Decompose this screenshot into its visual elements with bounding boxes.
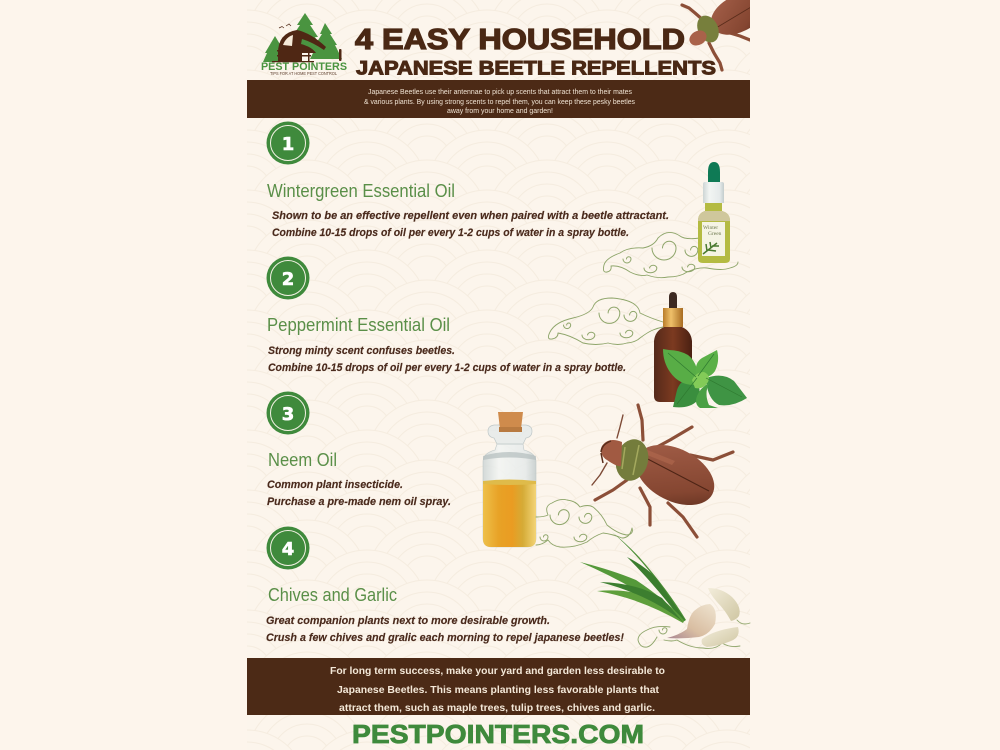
text 4: Crush a few chives and gralic each morning to repel japanese beetles! (266, 632, 624, 644)
text 1: Combine 10-15 drops of oil per every 1-2 cups of water in a spray bottle. (272, 227, 629, 239)
text 2 (268, 345, 626, 374)
text 4: Great companion plants next to more desirable growth. (266, 615, 550, 627)
title: JAPANESE BEETLE REPELLENTS (356, 58, 716, 80)
intro band: away from your home and garden! (447, 106, 553, 115)
icon: garlic cloves (667, 588, 740, 647)
badge 2 (266, 256, 310, 300)
badge 2: 2 (282, 269, 294, 290)
text 2: Combine 10-15 drops of oil per every 1-2 cups of water in a spray bottle. (268, 362, 626, 374)
title (355, 24, 716, 80)
logo: Pest Pointers: PEST POINTERS (261, 61, 347, 73)
text 3: Purchase a pre-made nem oil spray. (267, 496, 451, 508)
cloud swirl 1 (603, 232, 738, 278)
badge 4: 4 (282, 539, 294, 560)
text 1 (272, 210, 669, 239)
icon: brown beetle (592, 405, 733, 537)
heading 2: Peppermint Essential Oil (267, 315, 450, 335)
badge 3: 3 (282, 404, 294, 425)
step 3: neem oil (266, 392, 451, 508)
badge 4 (266, 526, 310, 570)
icon: wintergreen bottle: Green (708, 231, 722, 237)
step 4: chives and garlic (266, 526, 624, 644)
text 4 (266, 615, 624, 644)
logo: Pest Pointers (261, 13, 347, 76)
text 1: Shown to be an effective repellent even when paired with a beetle attractant. (272, 210, 669, 222)
badge 1: 1 (282, 134, 294, 155)
cloud swirl 4 (638, 620, 750, 648)
icon: wintergreen bottle: Winter (703, 225, 718, 231)
footer band: For long term success, make your yard and garden less desirable to (330, 665, 665, 677)
step 2: peppermint (266, 256, 626, 374)
intro band: Japanese Beetles use their antennae to pick up scents that attract them to their mates (368, 87, 632, 96)
badge 1 (266, 122, 310, 164)
cloud swirl 2 (548, 298, 663, 344)
step 1: wintergreen (266, 122, 669, 239)
intro band: & various plants. By using strong scents to repel them, you can keep these pesky beetles (364, 97, 635, 106)
icon: neem oil jar (483, 412, 536, 547)
icon: mint leaves (663, 349, 747, 408)
heading 1: Wintergreen Essential Oil (267, 181, 455, 201)
text 3 (267, 479, 451, 508)
badge 3 (266, 392, 310, 434)
icon: chives (580, 532, 686, 623)
footer band: Japanese Beetles. This means planting less favorable plants that (337, 684, 659, 696)
intro band (247, 80, 750, 118)
heading 3: Neem Oil (268, 450, 337, 470)
text 3: Common plant insecticide. (267, 479, 403, 491)
footer band (247, 658, 750, 715)
website url: PESTPOINTERS.COM (352, 719, 644, 749)
cloud swirl 3 (536, 499, 632, 547)
icon: wintergreen bottle (698, 162, 730, 263)
title: 4 EASY HOUSEHOLD (355, 24, 685, 56)
heading 4: Chives and Garlic (268, 585, 397, 605)
text 2: Strong minty scent confuses beetles. (268, 345, 455, 357)
icon: beetle top right (680, 0, 750, 72)
patterned panel (247, 0, 750, 750)
infographic (247, 0, 750, 750)
footer band: attract them, such as maple trees, tulip trees, chives and garlic. (339, 702, 655, 714)
icon: peppermint bottle (654, 292, 692, 402)
logo: Pest Pointers: TIPS FOR AT HOME PEST CONTROL (270, 71, 338, 76)
